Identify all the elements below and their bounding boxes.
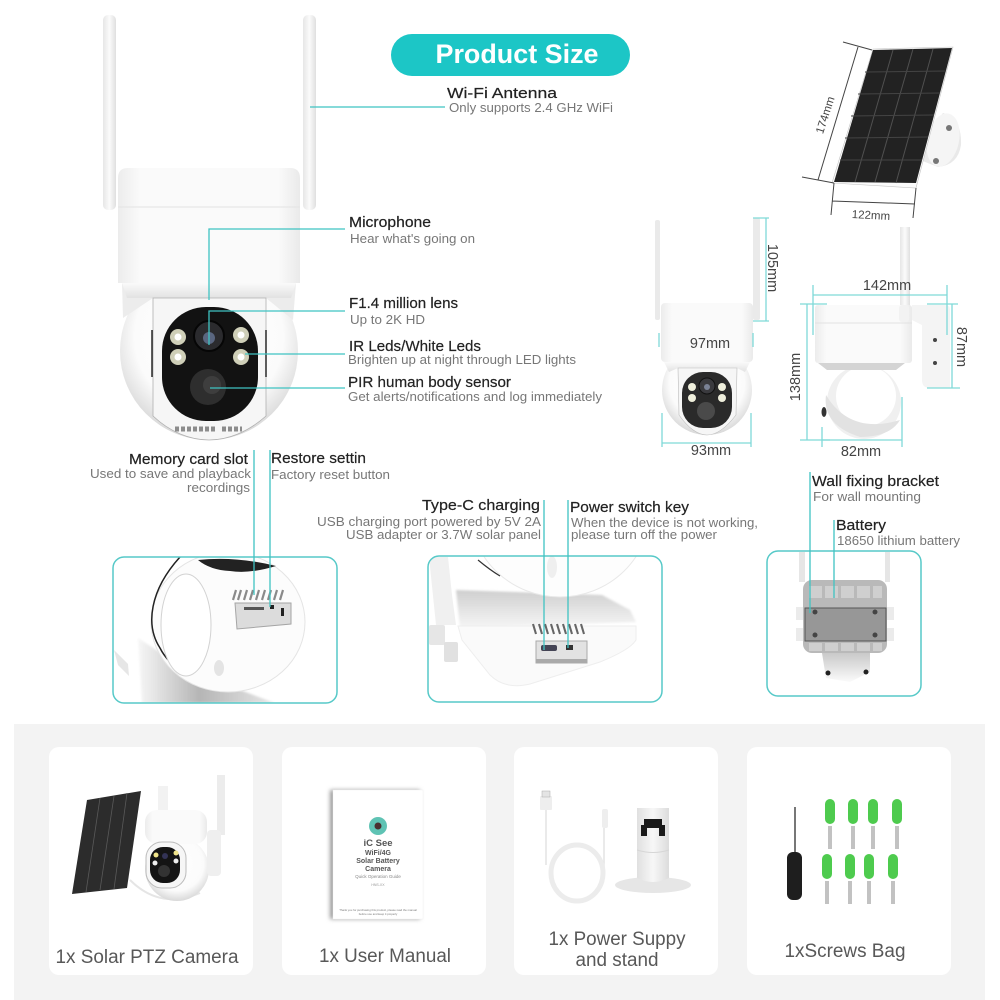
card: user manual: Camera [365, 866, 391, 873]
callout lines: Type-C and power switch [544, 500, 568, 650]
card: user manual: Thank you for purchasing this product, please read the manual [339, 908, 417, 912]
label: PIR sensor [348, 375, 603, 404]
label: IR LEDs: IR Leds/White Leds [349, 339, 481, 355]
dimension: 82mm [822, 397, 902, 460]
card: user manual: iC See [363, 838, 393, 849]
label: lens: Up to 2K HD [350, 313, 425, 327]
label: memory card slot: Memory card slot [129, 452, 248, 468]
card: user manual [282, 747, 486, 975]
label: IR LEDs: Brighten up at night through LED lights [348, 353, 576, 367]
label: battery: 18650 lithium battery [837, 534, 961, 548]
detail panel: memory card and reset [113, 552, 337, 703]
card: solar PTZ camera [49, 747, 253, 975]
detail panel: Type-C and power switch [427, 555, 663, 703]
main camera front view [103, 15, 316, 440]
label: power switch key [570, 500, 758, 542]
card: user manual: WiFi/4G [365, 850, 392, 857]
card: user manual: before use and keep it properly [359, 912, 398, 916]
solar panel with mount [832, 47, 964, 188]
small camera front view [655, 218, 760, 435]
label: wall fixing bracket: Wall fixing bracket [812, 474, 939, 490]
label: memory card slot: recordings [187, 481, 250, 495]
card: power supply and stand: and stand [576, 950, 658, 971]
dimension: 93mm [662, 413, 751, 459]
label: Wi-Fi antenna: Only supports 2.4 GHz WiFi [449, 101, 613, 115]
label: Wi-Fi antenna: Wi-Fi Antenna [447, 86, 558, 102]
label: PIR sensor: Get alerts/notifications and log immediately [348, 390, 603, 404]
card: solar PTZ camera: 1x Solar PTZ Camera [56, 947, 239, 968]
card: user manual: Quick Operation Guide [355, 874, 401, 879]
label: PIR sensor: PIR human body sensor [348, 375, 511, 391]
card: user manual: 1x User Manual [319, 946, 451, 967]
label: restore setting: Restore settin [271, 451, 366, 467]
label: battery: Battery [836, 518, 887, 534]
callout lines: wall bracket and battery [810, 472, 834, 613]
dimension: 138mm: 138mm [788, 353, 804, 401]
contents band [14, 724, 985, 1000]
card: user manual: Solar Battery [356, 858, 400, 865]
label: lens [349, 296, 458, 327]
detail panel: wall bracket and battery [767, 551, 921, 696]
dimension: 93mm: 93mm [691, 443, 731, 459]
dimension: 97mm: 97mm [690, 336, 730, 352]
label: wall fixing bracket: For wall mounting [813, 490, 921, 504]
dimension: 105mm: 105mm [764, 244, 780, 292]
label: microphone: Microphone [349, 215, 431, 231]
dimension: 138mm [788, 304, 830, 440]
dimension: 142mm: 142mm [863, 278, 911, 294]
dimension: 87mm: 87mm [953, 327, 969, 367]
dimension: 87mm [927, 304, 969, 388]
card: power supply and stand [514, 747, 718, 975]
camera side view [815, 227, 950, 439]
dimension: 97mm [659, 333, 753, 352]
label: lens: F1.4 million lens [349, 296, 458, 312]
label: power switch key: When the device is not working, [571, 516, 758, 530]
dimension: 174mm: 174mm [814, 95, 838, 135]
label: microphone: Hear what's going on [350, 232, 475, 246]
label: Wi-Fi antenna [447, 86, 613, 115]
card: screws bag: 1xScrews Bag [784, 941, 906, 962]
dimension: 105mm [753, 218, 780, 321]
label: microphone [349, 215, 475, 246]
label: Type-C charging: USB adapter or 3.7W solar panel [346, 528, 541, 542]
callout lines: memory card and reset [254, 450, 270, 607]
label: memory card slot: Used to save and playback [90, 467, 252, 481]
card: user manual: HNS-XX [371, 883, 385, 887]
dimension: 122mm: 122mm [851, 209, 890, 223]
callout lines: main camera [209, 107, 445, 388]
label: Type-C charging: USB charging port powered by 5V 2A [317, 515, 542, 529]
card: power supply and stand: 1x Power Suppy [548, 929, 686, 950]
label: memory card slot [90, 452, 252, 495]
label: power switch key: please turn off the power [571, 528, 717, 542]
label: IR LEDs [348, 339, 576, 367]
dimension: 174mm [802, 42, 872, 183]
label: Type-C charging: Type-C charging [422, 498, 540, 514]
dimension: 82mm: 82mm [841, 444, 881, 460]
title pill: Product Size [391, 34, 630, 76]
label: battery [836, 518, 961, 548]
dimension: 142mm [813, 278, 947, 335]
label: Type-C charging [317, 498, 542, 542]
label: restore setting: Factory reset button [271, 468, 390, 482]
title pill: Product Size: Product Size [436, 39, 598, 69]
dimension: 122mm [831, 183, 916, 223]
label: restore setting [271, 451, 390, 482]
card: screws bag [747, 747, 951, 975]
label: power switch key: Power switch key [570, 500, 690, 516]
label: wall fixing bracket [812, 474, 939, 504]
